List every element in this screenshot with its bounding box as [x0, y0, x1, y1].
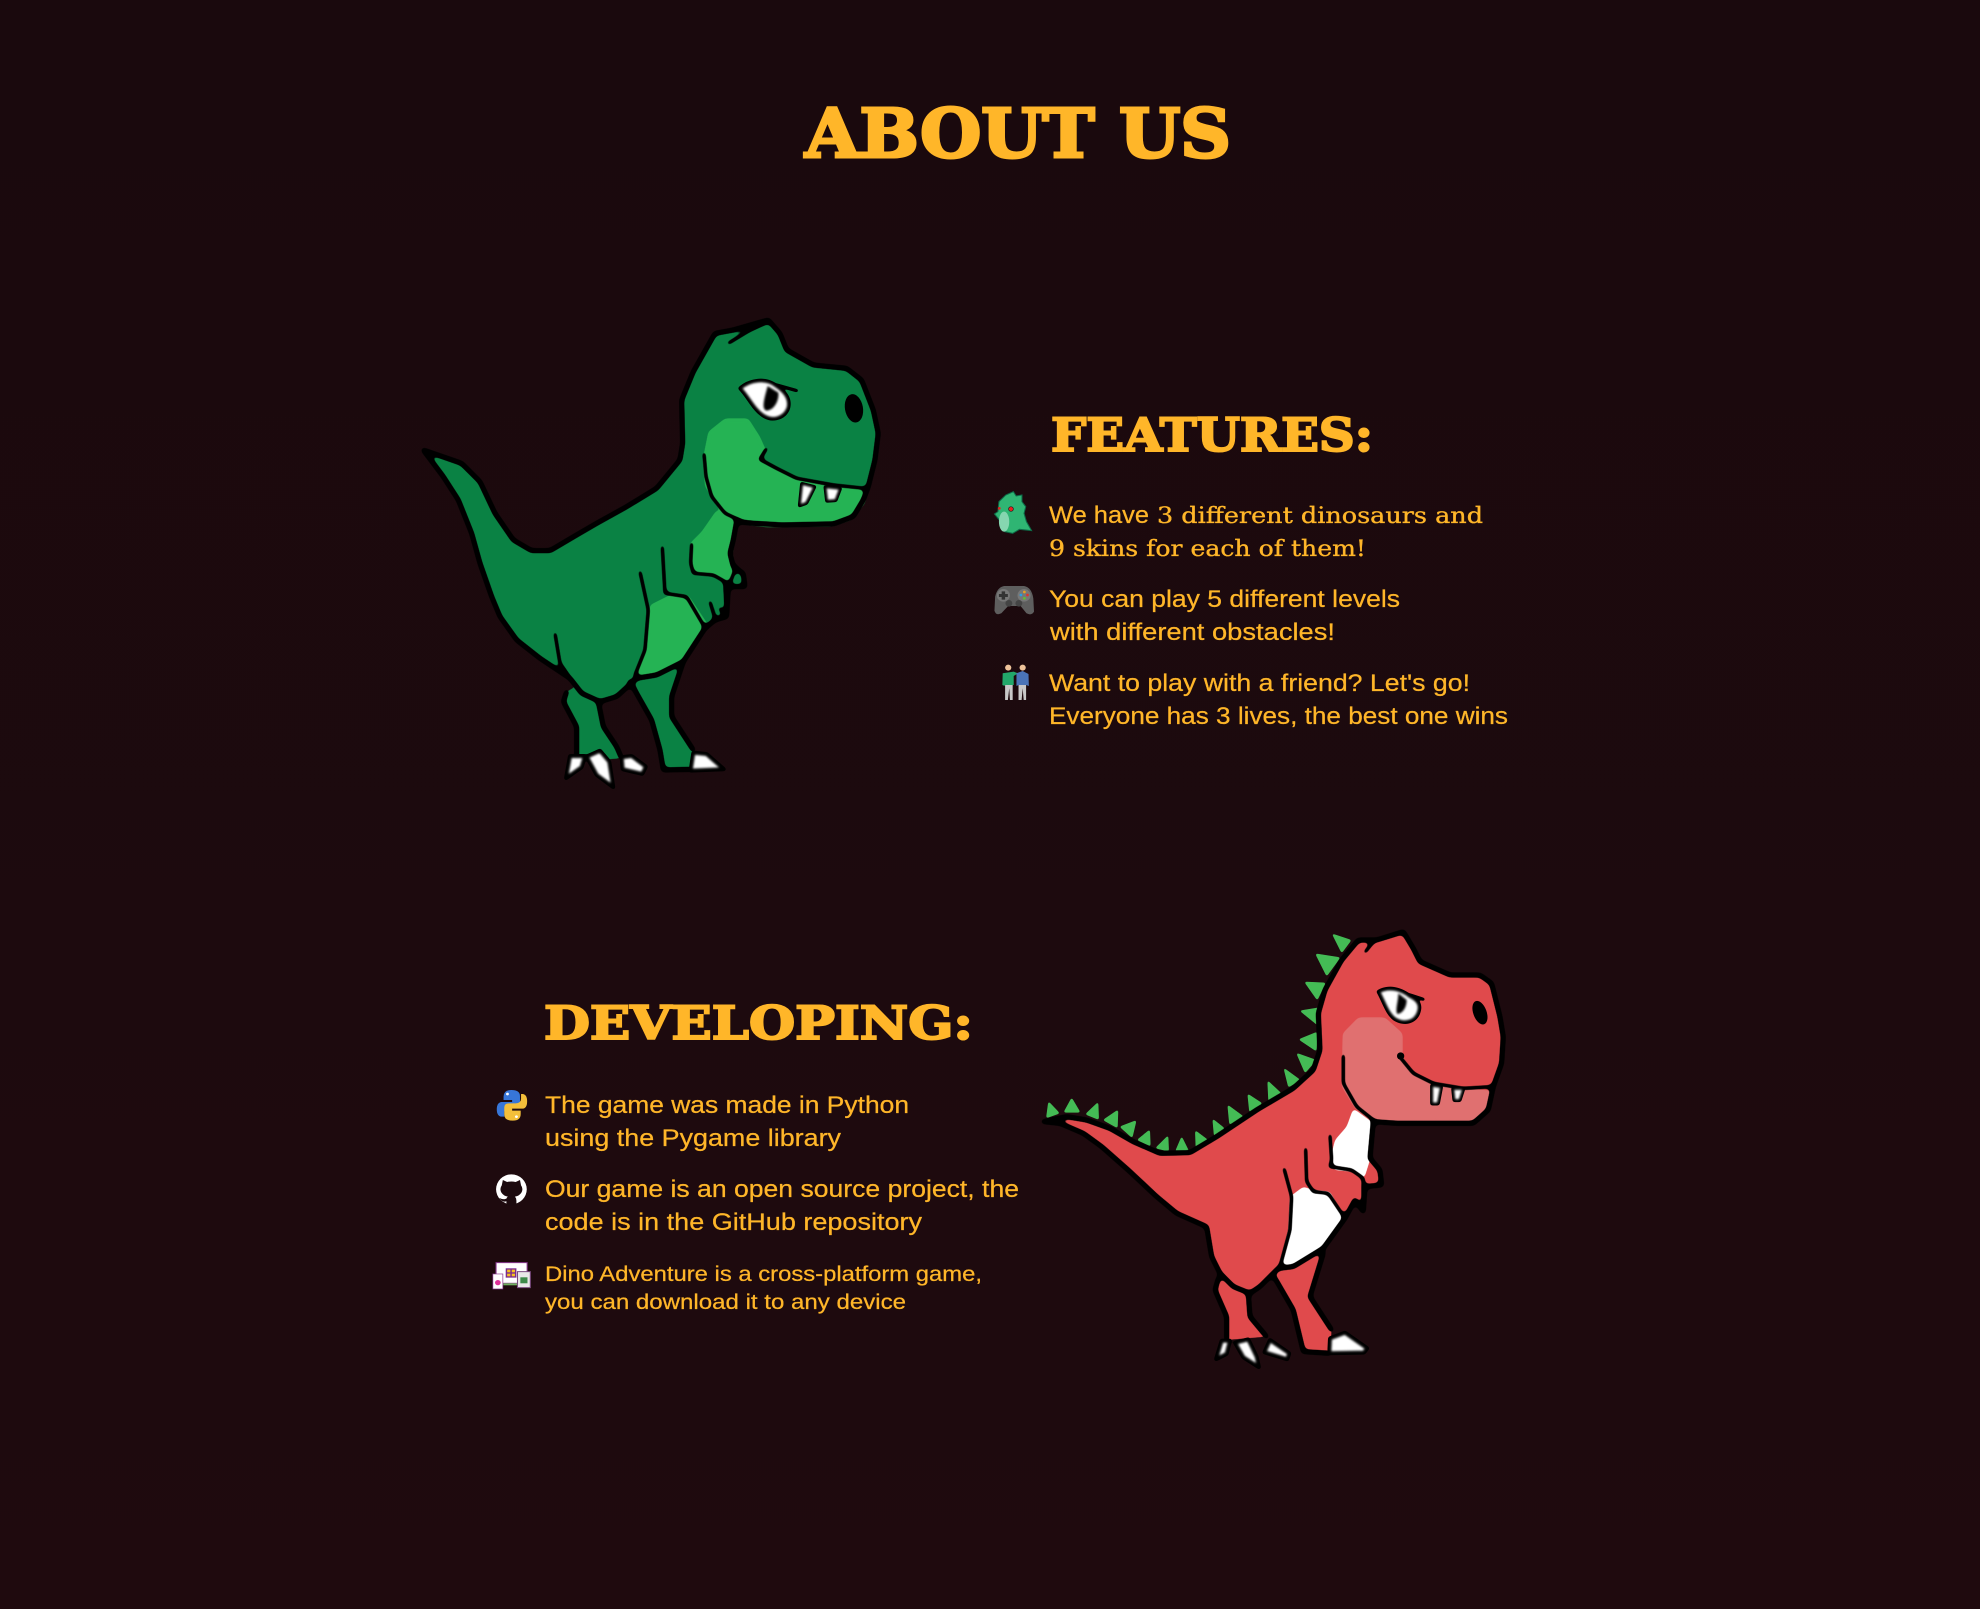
feature text: dinosaurs: 9 skins for each of them!	[1049, 537, 1366, 562]
claws	[1216, 1333, 1367, 1367]
icon: two friends	[1002, 665, 1029, 700]
title: ABOUT US	[804, 94, 1231, 173]
icon: small dinosaur	[994, 492, 1032, 533]
panel: features	[994, 408, 1508, 730]
developing text: python	[545, 1092, 909, 1152]
icon: github	[496, 1174, 527, 1206]
teeth	[799, 483, 841, 506]
developing text: python: using the Pygame library	[545, 1125, 841, 1152]
heading: developing: DEVELOPING:	[544, 996, 973, 1050]
developing text: github: code is in the GitHub repository	[545, 1209, 922, 1236]
icon: python	[497, 1090, 527, 1121]
teeth	[1432, 1085, 1464, 1104]
feature text: dinosaurs: We have	[1049, 502, 1149, 529]
feature text: levels: You can play 5 different levels	[1049, 586, 1400, 613]
illustration: red dinosaur	[1043, 932, 1503, 1367]
outlines	[1043, 932, 1503, 1353]
eye	[740, 380, 797, 419]
feature text: dinosaurs	[1049, 502, 1483, 562]
panel: developing	[493, 996, 1019, 1314]
feature text: dinosaurs: 3 different dinosaurs and	[1157, 504, 1483, 529]
developing text: python: The game was made in Python	[545, 1092, 909, 1119]
developing text: github: Our game is an open source project, the	[545, 1176, 1019, 1203]
developing text: cross-platform	[545, 1262, 982, 1314]
icon: gamepad	[994, 586, 1034, 614]
feature text: friends: Want to play with a friend? Let's go!	[1049, 670, 1470, 697]
claws	[566, 751, 724, 787]
developing text: cross-platform: you can download it to any device	[545, 1290, 906, 1314]
icon: devices	[493, 1263, 530, 1289]
feature text: friends	[1049, 670, 1508, 730]
illustration: green dinosaur	[423, 320, 878, 787]
feature text: friends: Everyone has 3 lives, the best one wins	[1049, 703, 1508, 730]
feature text: levels	[1049, 586, 1400, 646]
feature text: levels: with different obstacles!	[1049, 619, 1335, 646]
outlines	[423, 320, 878, 770]
developing text: github	[545, 1176, 1019, 1236]
heading: features: FEATURES:	[1051, 408, 1373, 462]
developing text: cross-platform: Dino Adventure is a cross-platform game,	[545, 1262, 982, 1286]
eye	[1378, 989, 1423, 1022]
